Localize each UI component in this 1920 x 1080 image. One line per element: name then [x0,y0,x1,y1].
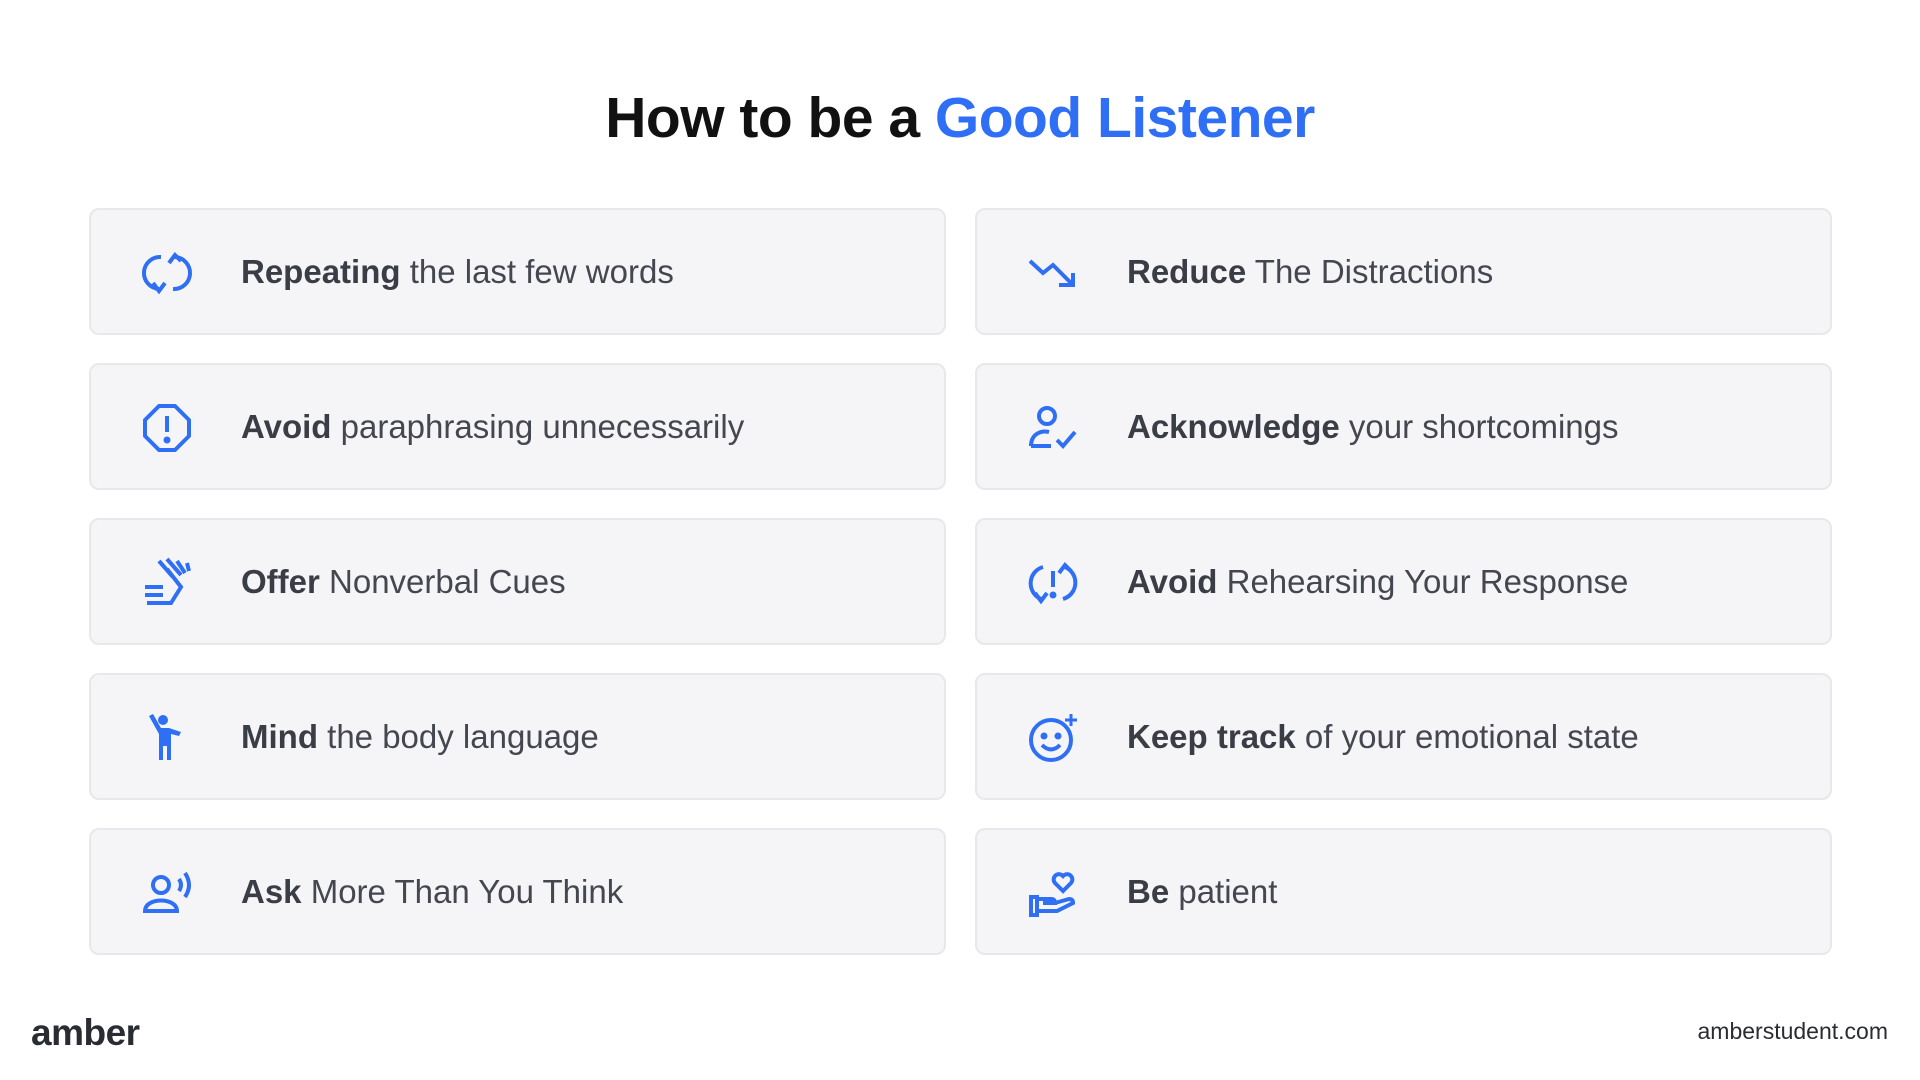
icon: trend down [1028,260,1075,287]
text: Ask More Than You Think [241,873,623,910]
card: acknowledge [975,363,1832,490]
card: avoid paraphrasing [89,363,946,490]
card: repeating [89,208,946,335]
logo: amber: amber [31,1012,140,1053]
text: Be patient [1127,873,1277,910]
card: be patient [975,828,1832,955]
text: Avoid Rehearsing Your Response [1127,563,1628,600]
icon: user check [1029,406,1076,449]
icon: person speaking [143,872,191,913]
footer url: amberstudent.com [1698,1018,1888,1044]
card: reduce [975,208,1832,335]
icon: person [149,714,181,760]
icon: alert octagon [143,404,191,452]
card: offer cues [89,518,946,645]
text: Offer Nonverbal Cues [241,563,566,600]
icon: hand heart [1029,872,1075,917]
icon: hand wave [145,558,191,605]
icon: repeat arrows [142,252,192,294]
text: Repeating the last few words [241,253,674,290]
text: Mind the body language [241,718,599,755]
icon: smile plus [1029,714,1077,762]
card: avoid rehearsing [975,518,1832,645]
text: Acknowledge your shortcomings [1127,408,1618,445]
text: Reduce The Distractions [1127,253,1493,290]
card: ask more [89,828,946,955]
card: mind body [89,673,946,800]
icon: repeat alert [1028,562,1078,604]
card: keep track [975,673,1832,800]
title: How to be a Good Listener [605,86,1315,150]
text: Keep track of your emotional state [1127,718,1639,755]
text: Avoid paraphrasing unnecessarily [241,408,744,445]
